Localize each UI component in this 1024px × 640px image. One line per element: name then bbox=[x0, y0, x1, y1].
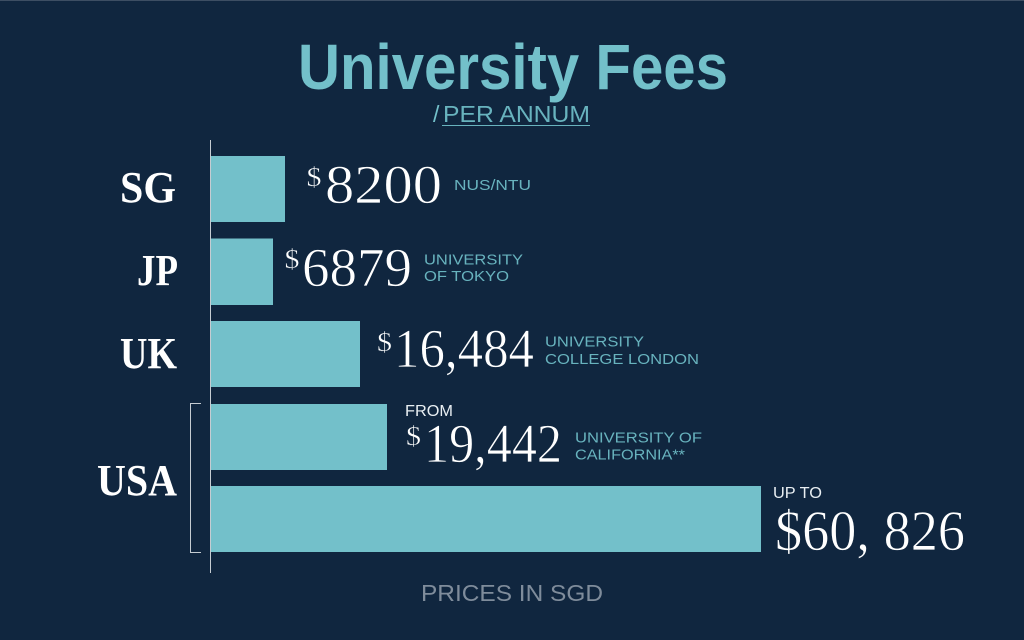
subtitle: PER ANNUM bbox=[443, 101, 590, 127]
value: UK: 16,484 bbox=[394, 318, 534, 379]
footnote: prices in SGD: PRICES IN SGD bbox=[421, 580, 603, 606]
institution: UK bbox=[545, 334, 699, 368]
bar: SG bbox=[211, 156, 285, 222]
value: USA from: 19,442 bbox=[424, 413, 562, 474]
institution: UK: COLLEGE LONDON bbox=[545, 351, 699, 368]
panel: USA rows bbox=[97, 403, 965, 563]
label: USA: USA bbox=[97, 456, 177, 505]
value: SG: 8200 bbox=[325, 154, 442, 215]
label: JP: JP bbox=[137, 246, 178, 295]
institution: JP: UNIVERSITY bbox=[424, 252, 523, 268]
value: JP: 6879 bbox=[302, 237, 412, 298]
bar: USA from bbox=[211, 404, 387, 470]
institution: SG: NUS/NTU bbox=[454, 177, 531, 194]
bar: JP bbox=[211, 238, 273, 305]
panel: JP row bbox=[137, 237, 523, 305]
panel: UK row bbox=[120, 318, 699, 387]
vertical axis bbox=[210, 140, 211, 573]
subtitle: / bbox=[433, 101, 440, 127]
institution: USA: CALIFORNIA** bbox=[575, 446, 685, 464]
value: UK: $ bbox=[377, 327, 392, 357]
label: SG: SG bbox=[120, 163, 176, 212]
institution: JP: OF TOKYO bbox=[424, 268, 509, 285]
institution: USA: UNIVERSITY OF bbox=[575, 430, 702, 446]
panel: SG row bbox=[120, 154, 531, 222]
bar: UK bbox=[211, 321, 360, 387]
label: UK: UK bbox=[120, 329, 177, 378]
value: USA up to: $60, 826 bbox=[775, 500, 965, 563]
from label: FROM bbox=[405, 403, 453, 420]
up to label: UP TO bbox=[773, 485, 822, 502]
value: JP: $ bbox=[284, 244, 300, 274]
institution: UK: UNIVERSITY bbox=[545, 334, 644, 350]
value: USA from: $ bbox=[406, 421, 421, 451]
institution: USA bbox=[575, 430, 702, 464]
bar: USA up to bbox=[211, 486, 761, 552]
value: SG: $ bbox=[306, 162, 322, 192]
bracket bbox=[190, 404, 201, 552]
institution: JP bbox=[424, 252, 523, 285]
title: University Fees bbox=[298, 31, 728, 103]
